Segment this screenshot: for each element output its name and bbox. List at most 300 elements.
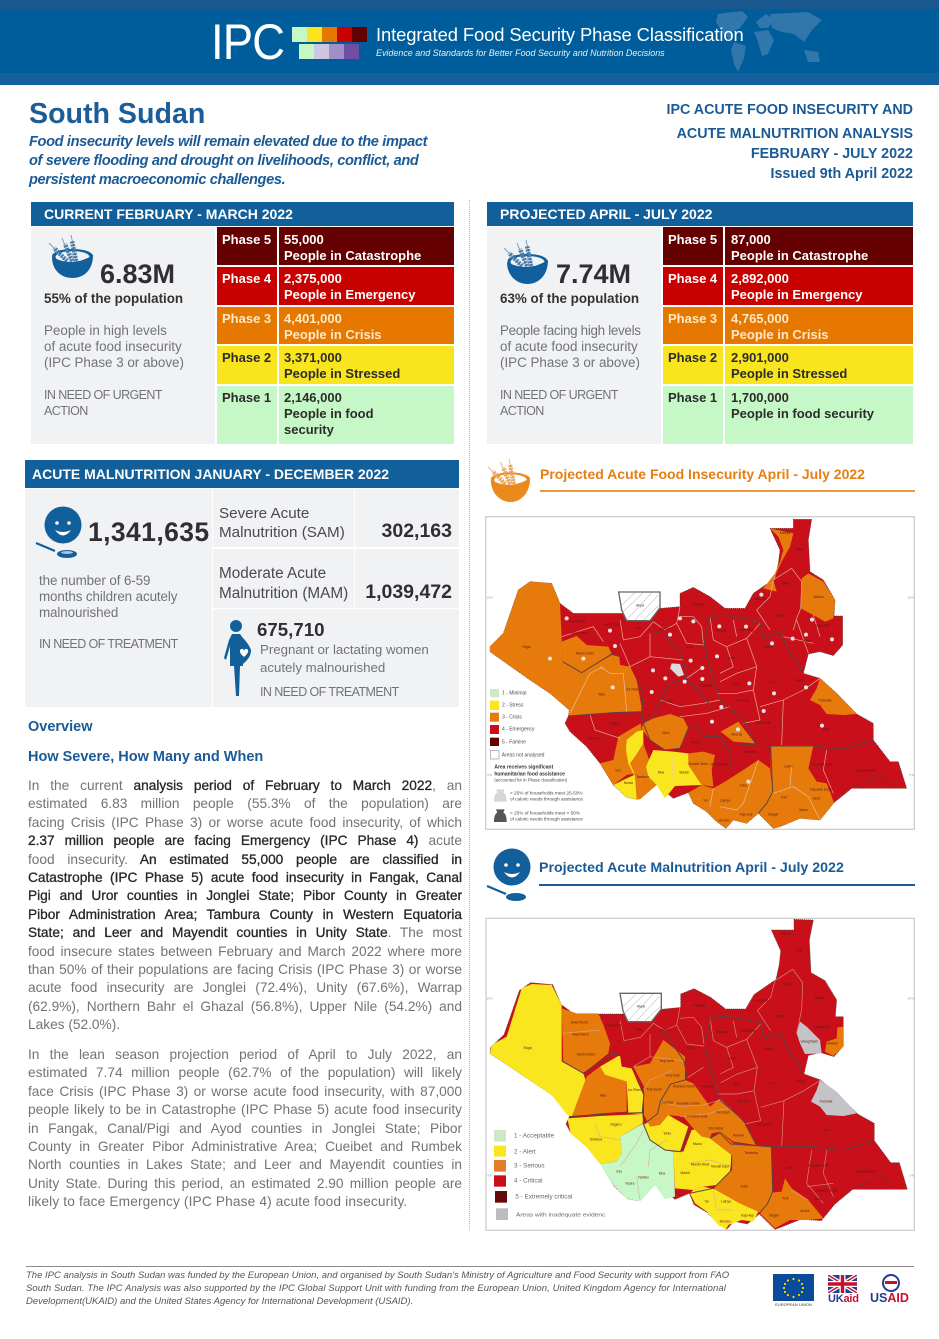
analysis title block: ACUTE MALNUTRITION ANALYSIS: [677, 126, 913, 142]
map 2 country base: [490, 919, 907, 1229]
map 1 graticule ticks: 5°N: [487, 773, 492, 777]
big number: 1,341,635: [88, 517, 210, 547]
map 1 graticule ticks: [487, 596, 914, 777]
description: of acute food insecurity: [44, 339, 182, 354]
title: South Sudan: [29, 98, 205, 130]
heading rule: [540, 490, 915, 492]
text block: current analysis: estimated 6.83 million people (55.3% of the population) are: [28, 796, 462, 811]
map 2 county labels: Koch: [687, 1046, 695, 1050]
map 1 county labels: Juba: [739, 784, 747, 788]
need note: IN NEED OF URGENT: [44, 388, 162, 402]
map 1 county labels: Uror: [768, 680, 776, 684]
map 1 county labels: Nasir: [803, 639, 811, 643]
footer rule: [26, 1266, 914, 1267]
need note: IN NEED OF TREATMENT: [260, 685, 399, 699]
map 1 state boundaries: [563, 615, 873, 813]
map 2 county labels: Ezo: [616, 1170, 622, 1174]
map 1 county labels: Magwi: [769, 812, 778, 816]
map 2 county labels: Mayom: [661, 1028, 672, 1032]
text block: current analysis: (62.9%), Northern Bahr el Ghazal (56.8%), Upper Nile (54.2%) and: [28, 999, 462, 1014]
phase 2 row: [663, 346, 913, 384]
population share: 63% of the population: [500, 291, 639, 306]
footer text: Development(UKAID) and the United States Agency for International Development (USAID).: [26, 1296, 413, 1307]
map heading: food insecurity: Projected Acute Food Insecurity April - July 2022: [540, 466, 865, 482]
text block: current analysis: facing Crisis (IPC Phase 3) or worse acute food insecurity, of which: [28, 815, 462, 830]
logo: organisation name: Integrated Food Security Phase Classification: [376, 24, 744, 45]
map 2 county labels: Wau: [600, 1093, 607, 1097]
phase 5 row: [663, 227, 913, 265]
description: [500, 323, 641, 370]
text block: current analysis: Pigi and Uror counties in Jonglei State; Pibor County in Greater: [28, 888, 462, 903]
map 2 county labels: Kapoeta North: [808, 1163, 830, 1167]
map 1 county labels: Tambura: [588, 736, 601, 740]
map 1 county labels: Aweil North: [569, 619, 586, 623]
map 1 not-analysed hatched area: [619, 592, 660, 621]
map 2 county labels: Pochalla: [820, 1100, 833, 1104]
phase 5 row: 55,000: [284, 232, 324, 247]
map 2 county labels: Ulang/Nasir: [801, 1040, 819, 1044]
map 2 county labels: Yambio: [638, 1176, 649, 1180]
phase 1 row: Phase 1: [668, 390, 717, 405]
text block: projection: likely to face Emergency (IPC Phase 4) acute food insecurity.: [28, 1194, 407, 1209]
text block: projection: estimated 7.74 million people (62.7% of the population) will likely: [28, 1065, 462, 1080]
need note: [44, 388, 162, 418]
description: (IPC Phase 3 or above): [44, 355, 184, 370]
panel heading: CURRENT FEBRUARY - MARCH 2022: [44, 206, 293, 222]
map 2 county labels: Aweil West: [572, 1032, 589, 1036]
map 1 county labels: Nzara: [624, 781, 633, 785]
phase 4 row: People in Emergency: [731, 287, 862, 302]
map 2 county labels: Fashoda: [755, 998, 768, 1002]
panel heading: [25, 460, 459, 488]
map 2 county labels: Canal/Pigi: [741, 1029, 756, 1033]
panel heading: PROJECTED APRIL - JULY 2022: [500, 206, 712, 222]
phase 2 row: People in Stressed: [284, 366, 400, 381]
map 1 county labels: Awerial: [731, 733, 742, 737]
map 2 county labels: Cueibet: [662, 1101, 673, 1105]
summary box: [487, 227, 661, 444]
description: [260, 642, 429, 675]
map 1 county labels: Yei: [703, 799, 708, 803]
map 2 county labels: Bor South: [757, 1122, 772, 1126]
phase 5 row: Phase 5: [668, 232, 717, 247]
map 2 county labels: Longochuk: [814, 1025, 830, 1029]
SAM label: [213, 489, 354, 547]
text block: current analysis: Catastrophe (IPC Phase 5) acute food insecurity in Fangak, Canal: [28, 870, 462, 885]
map 1 legend: 2 - Stress: [502, 703, 524, 709]
subtitle: [28, 134, 428, 188]
map 1 county labels: Maban: [814, 595, 824, 599]
logo: tagline: Evidence and Standards for Better Food Security and Nutrition Decisions: [376, 48, 665, 58]
description: months children acutely: [39, 589, 177, 604]
map 1 county labels: Akobo: [795, 678, 805, 682]
map 1 county labels: Kapoeta South: [810, 788, 832, 792]
map 1 county labels: Koch: [686, 645, 694, 649]
description: [44, 323, 184, 370]
logo: phase colour squares: [292, 27, 367, 59]
map 1 county labels: Morobo: [718, 819, 730, 823]
text block: projection: [28, 1047, 462, 1209]
map 1 legend: of caloric needs through assistance: [510, 817, 583, 822]
map 2 county labels: Kapoeta South: [816, 1189, 838, 1193]
map 2 county labels: Aweil North: [571, 1021, 588, 1025]
phase 1 row: security: [284, 422, 334, 437]
map 2 legend: 2 - Alert: [514, 1149, 536, 1156]
map 1 county labels: Aweil East: [604, 623, 620, 627]
map 1 county labels: Wulu: [662, 731, 670, 735]
map heading: malnutrition: Projected Acute Malnutrition April - July 2022: [539, 860, 844, 876]
map 2 county labels: Torit: [782, 1197, 789, 1201]
text block: current analysis: In the current analysis period of February to March 2022, an: [28, 778, 462, 793]
description: People facing high levels: [500, 323, 641, 338]
map 2 county labels: Maiwut: [827, 1042, 838, 1046]
map 2 county labels: Rumbek Centre: [677, 1102, 700, 1106]
map 2 county labels: Magwi: [769, 1213, 779, 1217]
icon: child with spoon (blue): [486, 848, 530, 901]
map 2 county labels: [524, 932, 876, 1224]
description: acutely malnourished: [260, 660, 385, 675]
MAM label: [213, 549, 354, 608]
map 2 county labels: Maridi: [680, 1171, 690, 1175]
map 2 county labels: Mvolo: [693, 1142, 702, 1146]
phase 5 row: 87,000: [731, 232, 771, 247]
map 2 county labels: Mundri West: [691, 1163, 709, 1167]
map 1 county labels: Tambura: [636, 775, 649, 779]
map 1 county labels: Raga: [522, 645, 530, 649]
map 1 county labels: Pochalla: [819, 698, 832, 702]
text block: current analysis: 2.37 million people are facing Emergency (IPC Phase 4) acute: [28, 833, 462, 848]
map 1 county labels: Lainya: [720, 799, 730, 803]
map 2 legend: 5 - Extremely critical: [515, 1194, 572, 1201]
map 2 county labels: Terekeka: [744, 1151, 758, 1155]
map 2 county labels: Duk: [734, 1083, 740, 1087]
phase 2 row: 3,371,000: [284, 350, 342, 365]
map 2 legend: 4 - Critical: [514, 1178, 542, 1185]
phase 1 row: Phase 1: [222, 390, 271, 405]
map 1 county labels: Ikotos: [799, 808, 808, 812]
map 2 legend: 1 - Acceptable: [514, 1133, 555, 1140]
map 1 graticule ticks: 5°N: [909, 773, 914, 777]
map 2 county labels: Budi: [815, 1197, 822, 1201]
subtitle: of severe flooding and drought on livelihoods, conflict, and: [29, 153, 418, 169]
map 1 county labels: Ezo: [615, 768, 621, 772]
panel heading: [31, 202, 454, 226]
map 2 county labels: Pibor: [823, 1129, 832, 1133]
description: (IPC Phase 3 or above): [500, 355, 640, 370]
map 2 county labels: Kajo-keji: [741, 1214, 754, 1218]
phase 2 row: 2,901,000: [731, 350, 789, 365]
description: the number of 6-59: [39, 573, 150, 588]
map 1 legend: Area receives significant: [494, 765, 554, 771]
panel: projected April - July 2022: [487, 202, 913, 444]
map 2 county labels: Tonj South: [646, 1088, 662, 1092]
map 2 county labels: Manyo: [781, 932, 791, 936]
need note: IN NEED OF URGENT: [500, 388, 618, 402]
SAM value: [355, 489, 459, 547]
map 2 county labels: Nzara: [626, 1182, 635, 1186]
MAM label: Malnutrition (MAM): [219, 585, 348, 602]
map 2 county labels: Aweil Centre: [577, 1052, 596, 1056]
map 1 legend: of caloric needs through assistance: [510, 797, 583, 802]
header banner: [0, 0, 939, 85]
logo: European Union: EUROPEAN UNION: [775, 1302, 812, 1307]
description: malnourished: [39, 605, 118, 620]
map 1 county labels: Wau: [598, 692, 605, 696]
map 2 county labels: Ikotos: [801, 1209, 810, 1213]
map 1 county labels: Abyei: [636, 604, 644, 608]
text block: projection: North counties in Lakes State; and Leer and Mayendit counties in: [28, 1157, 462, 1172]
map 1 county labels: Kajo-keji: [740, 813, 753, 817]
map 2 state boundaries: [563, 1016, 874, 1213]
map 1 legend: (accounted for in Phase classification): [494, 778, 568, 783]
SAM value: 302,163: [382, 520, 452, 542]
map 1 legend: 4 - Emergency: [502, 727, 535, 733]
map 2 county labels: Mundri East: [711, 1164, 729, 1168]
map 2 graticule ticks: [487, 996, 914, 1178]
map 1 county labels: Nagero: [610, 721, 621, 725]
subheading: How Severe, How Many and When: [28, 749, 263, 765]
map 2 county labels: Pariang: [694, 1003, 705, 1007]
map 2 county labels: Yei: [704, 1200, 709, 1204]
map 2 county labels: Ibba: [659, 1171, 665, 1175]
subtitle: persistent macroeconomic challenges.: [29, 172, 285, 188]
map 2 graticule ticks: 10°N: [487, 996, 493, 1000]
phase 1 row: 2,146,000: [284, 390, 342, 405]
map 1 county labels: Manyo: [780, 531, 790, 535]
analysis title block: FEBRUARY - JULY 2022: [751, 146, 913, 162]
pregnant women number: 675,710: [257, 619, 325, 640]
icon: orange bowl with wheat: [488, 459, 530, 502]
map 2 county labels: Aweil East: [606, 1024, 621, 1028]
big number: 7.74M: [556, 259, 631, 289]
map 2 county labels: Rumbek North: [673, 1085, 695, 1089]
icon: world map watermark: [716, 11, 822, 72]
phase 3 row: [217, 307, 454, 344]
need note: ACTION: [44, 404, 88, 418]
phase 4 row: People in Emergency: [284, 287, 416, 302]
overview heading: Overview: [28, 719, 92, 735]
MAM label: Moderate Acute: [219, 565, 326, 582]
phase 3 row: 4,401,000: [284, 311, 342, 326]
map 2 county labels: Kapoeta East: [856, 1170, 876, 1174]
map 1 country base: [490, 519, 907, 828]
map 1 county labels: Aweil Centre: [576, 651, 595, 655]
text block: projection: in Fangak, Canal/Pigi and Ayod counties in Jonglei State; Pibor: [28, 1121, 462, 1136]
SAM label: Severe Acute: [219, 505, 309, 522]
logo: USAID: USAID: [870, 1291, 909, 1305]
need note: [500, 388, 618, 418]
text block: current analysis: [28, 778, 462, 1032]
phase 1 row: [217, 386, 454, 444]
text block: current analysis: Lakes (52.0%).: [28, 1017, 120, 1032]
map 2 county labels: Ayod: [728, 1057, 736, 1061]
map 2 legend: [494, 1130, 605, 1220]
phase 2 row: Phase 2: [668, 350, 717, 365]
header top strip: [0, 0, 939, 9]
dotted column divider: [469, 200, 470, 1230]
icon: child with spoon: [36, 506, 82, 558]
map 2 county labels: Twic East: [736, 1100, 751, 1104]
icon: pregnant woman: [224, 620, 251, 696]
phase 4 row: Phase 4: [668, 271, 717, 286]
map 1 county labels: Cueibet: [661, 700, 672, 704]
map 1 county labels: Melut: [782, 582, 790, 586]
heading rule: [539, 884, 915, 886]
map 1 county labels: Lafon: [784, 765, 793, 769]
map 2 county labels: Lafon: [785, 1166, 794, 1170]
map 1 county labels: Fashoda: [754, 597, 767, 601]
icon: bowl with wheat: [48, 235, 93, 278]
text block: projection: County in Greater Pibor Administrative Area; Cueibet and Rumbek: [28, 1139, 462, 1154]
analysis title block: Issued 9th April 2022: [770, 166, 913, 182]
phase 4 row: Phase 4: [222, 271, 271, 286]
logo: IPC wordmark: IPC: [211, 14, 284, 70]
panel heading: ACUTE MALNUTRITION JANUARY - DECEMBER 2022: [32, 466, 389, 482]
phase 3 row: Phase 3: [222, 311, 271, 326]
population share: 55% of the population: [44, 291, 183, 306]
icon: bowl with wheat: [504, 240, 548, 284]
map 2 county labels: Awerial: [733, 1134, 744, 1138]
map 1 county labels: Twic East: [736, 699, 750, 703]
map 1 county labels: Canal/Pigi: [739, 628, 755, 632]
map 2 legend: Areas with inadequate evidenc: [516, 1213, 605, 1219]
phase 3 row: 4,765,000: [731, 311, 789, 326]
description: People in high levels: [44, 323, 167, 338]
phase 1 row: [663, 386, 913, 444]
map 1 county labels: Mundri West: [689, 762, 708, 766]
map: projected acute malnutrition: [485, 918, 915, 1231]
map 1 county labels: Nyirol: [764, 646, 773, 650]
phase 1 row: People in food: [284, 406, 374, 421]
text block: current analysis: State; and Leer and Mayendit counties in Unity State. The most: [28, 925, 462, 940]
map 2 county labels: Nyirol: [765, 1047, 774, 1051]
MAM value: 1,039,472: [365, 581, 452, 603]
map 1 legend: 3 - Crisis: [502, 715, 522, 721]
map 1 county labels: Baliet: [775, 614, 783, 618]
map 1 legend: 1 - Minimal: [502, 691, 526, 697]
phase 2 row: [217, 346, 454, 384]
map 2 county labels: Rijin: [797, 948, 803, 952]
map 2 not-analysed hatched area: [620, 993, 661, 1022]
map 2 graticule ticks: 5°N: [909, 1174, 914, 1178]
phase 2 row: Phase 2: [222, 350, 271, 365]
phase 4 row: [663, 267, 913, 305]
logo: UKaid: UKaid: [828, 1293, 859, 1305]
pregnant women box: [213, 609, 459, 707]
map: projected acute food insecurity: [485, 516, 915, 830]
map 1 legend: [490, 689, 583, 822]
phase 5 row: Phase 5: [222, 232, 271, 247]
map 1 county labels: Mayom: [660, 627, 671, 631]
text block: projection: In the lean season projection period of April to July 2022, an: [28, 1047, 462, 1062]
map 1 county labels: Terekeka: [743, 750, 757, 754]
map 2 county labels: Maban: [815, 996, 825, 1000]
map 1 legend: humanitarian food assistance: [494, 772, 565, 778]
map 2 county labels: Akobo: [796, 1079, 806, 1083]
map 1 county labels: Longochuk: [813, 624, 829, 628]
need note: IN NEED OF TREATMENT: [39, 637, 178, 651]
map 2 county labels: Yirol East: [716, 1111, 730, 1115]
footer text: The IPC analysis in South Sudan was funded by the European Union, and organised by South Sudan's Ministry of Agriculture and Food Security with support from FAO: [26, 1270, 729, 1281]
map 1 county labels: [522, 531, 875, 823]
map 2 graticule ticks: 10°N: [908, 996, 914, 1000]
map 1 assistance markers: [548, 593, 834, 784]
map 2 county labels: Twic: [636, 1027, 643, 1031]
map 1 graticule ticks: 10°N: [487, 596, 493, 600]
map 2 county labels: Morobo: [720, 1220, 731, 1224]
map 1 county labels: Twic: [634, 626, 641, 630]
map 2 county labels: Tonj East: [666, 1074, 680, 1078]
map 2 legend: 3 - Serious: [514, 1163, 545, 1170]
map 1 county labels: Torit: [781, 796, 787, 800]
phase 3 row: People in Crisis: [284, 327, 382, 342]
description: [39, 573, 178, 620]
logo: European Union: [773, 1274, 814, 1307]
map 1 legend: 5 - Famine: [502, 739, 526, 745]
text block: current analysis: Pibor Administration Area; Tambura County in Western Equatoria: [28, 907, 462, 922]
map 2 county labels: Fangak: [716, 1030, 728, 1034]
map 2 county labels: Tonj North: [659, 1059, 674, 1063]
map 2 county labels: Panyijiar: [701, 1085, 715, 1089]
description: Pregnant or lactating women: [260, 642, 429, 657]
need note: ACTION: [500, 404, 544, 418]
text block: current analysis: acute food insecurity are Jonglei (72.4%), Unity (67.6%), Warrap: [28, 980, 462, 995]
map 1 county labels: Pariang: [693, 603, 704, 607]
phase 5 row: People in Catastrophe: [284, 248, 421, 263]
text block: projection: people likely to be in Catastrophe (IPC Phase 5) acute food insecurity: [28, 1102, 462, 1117]
SAM label: Malnutrition (SAM): [219, 524, 345, 541]
map 1 county labels: Aweil West: [571, 631, 587, 635]
text block: current analysis: than 50% of their populations are facing Crisis (IPC Phase 3) or worse: [28, 962, 462, 977]
map 1 county labels: Maridi: [679, 770, 689, 774]
map 1 county labels: Panyijiar: [700, 684, 714, 688]
phase 5 row: People in Catastrophe: [731, 248, 868, 263]
map 1 legend: Areas not analysed: [502, 753, 545, 759]
map 2 county labels: Raga: [524, 1046, 532, 1050]
phase 2 row: People in Stressed: [731, 366, 847, 381]
map 1 county labels: Jur River: [626, 687, 640, 691]
phase 3 row: Phase 3: [668, 311, 717, 326]
map 1 county labels: Kapoeta North: [812, 762, 834, 766]
map 2 county labels: Abyei: [637, 1004, 645, 1008]
phase 4 row: 2,892,000: [731, 271, 789, 286]
summary box: [31, 227, 215, 444]
logo: USAID: [870, 1274, 909, 1305]
panel: current February - March 2022: [31, 202, 454, 444]
phase 4 row: [217, 267, 454, 305]
map 1 county labels: Ayod: [727, 656, 735, 660]
text block: current analysis: food insecure states between February and March 2022 where more: [28, 944, 462, 959]
map 2 county labels: Yirol West: [708, 1127, 723, 1131]
map 1 county labels: Duk: [733, 682, 739, 686]
map 2 county lines: [562, 969, 833, 1210]
text block: projection: face Crisis (IPC Phase 3) or worse acute food insecurity, with 87,000: [28, 1084, 462, 1099]
phase 3 row: [663, 307, 913, 344]
map 1 legend: > 25% of households meet > 50%: [510, 811, 580, 816]
phase 1 row: People in food security: [731, 406, 874, 421]
MAM value: [355, 549, 459, 608]
map 2 county labels: Juba: [740, 1185, 748, 1189]
footer text: South Sudan. The IPC Analysis was also supported by the IPC Global Support Unit with funding from the European Union, United Kingdom Agency for International: [26, 1283, 726, 1294]
map 2 county labels: Wulu: [664, 1132, 671, 1136]
phase 4 row: 2,375,000: [284, 271, 342, 286]
map 1 county lines: [562, 568, 833, 820]
map 2 county labels: Rumbek East: [687, 1114, 707, 1118]
map 1 county labels: Mvolo: [692, 740, 701, 744]
map 1 county labels: Mundri East: [710, 763, 728, 767]
panel heading: [487, 202, 913, 226]
phase 5 row: [217, 227, 454, 265]
